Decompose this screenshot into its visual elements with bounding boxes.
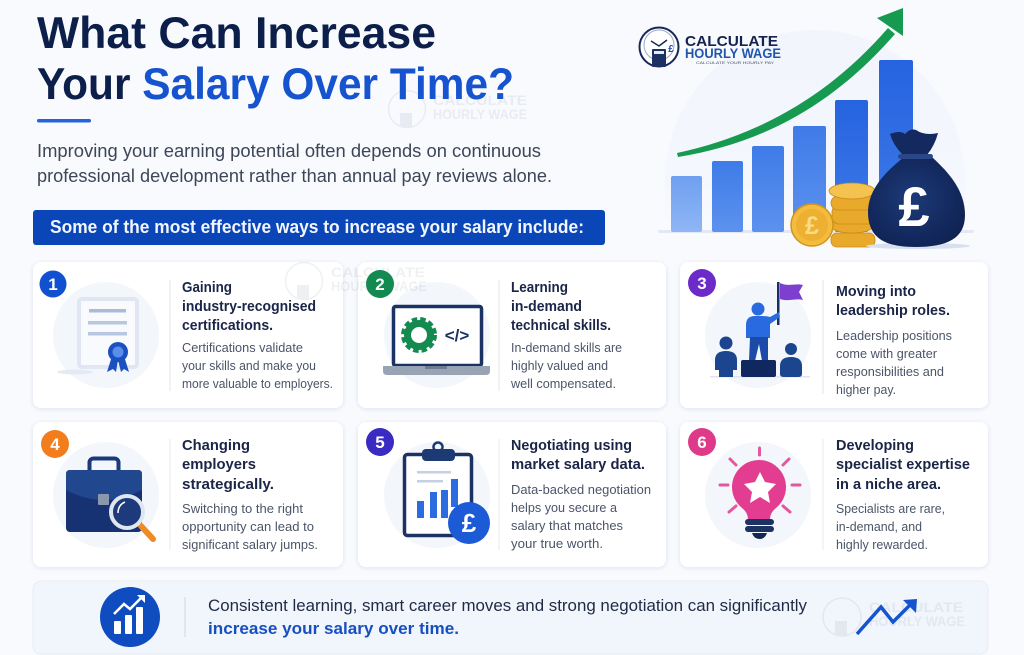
card 3 text: Moving into: [836, 283, 916, 300]
card 5 text: Negotiating using: [511, 437, 632, 454]
coin stack: [829, 183, 875, 247]
card 1 text: industry-recognised: [182, 298, 316, 315]
bars: [671, 60, 913, 232]
card 6 text: [836, 437, 970, 552]
icon: laptop: </>: [445, 326, 469, 345]
card 2 text: Learning: [511, 279, 568, 296]
coin with pound sign: £: [805, 212, 819, 240]
icon: briefcase with magnifier: [53, 442, 159, 548]
logo: [640, 28, 781, 67]
badge 1: [40, 270, 66, 298]
card 2 text: in-demand: [511, 298, 582, 315]
card 1 text: more valuable to employers.: [182, 377, 333, 391]
section banner: Some of the most effective ways to increase your salary include:: [50, 217, 584, 237]
card 4 text: Switching to the right: [182, 502, 304, 516]
logo: CALCULATE: [685, 33, 778, 50]
badge 6: [688, 428, 716, 456]
icon: certificate: [53, 282, 159, 388]
badge 1: 1: [48, 275, 58, 294]
card 6 text: highly rewarded.: [836, 538, 928, 552]
card 5 text: market salary data.: [511, 456, 645, 473]
footer text: [208, 596, 807, 638]
icon: light bulb with star: [705, 442, 811, 548]
watermark: top: HOURLY WAGE: [433, 106, 527, 122]
title accent bar: [37, 119, 91, 122]
intro paragraph: [37, 140, 552, 186]
card 1 text: [182, 279, 333, 391]
watermark: card 1: [286, 262, 427, 300]
card 3 text: come with greater: [836, 347, 937, 361]
card 4 text: employers: [182, 456, 256, 473]
watermark: top: CALCULATE: [433, 92, 527, 108]
card 1 text: your skills and make you: [182, 359, 316, 373]
icon: chart badge: [100, 587, 160, 647]
card 4 text: significant salary jumps.: [182, 538, 318, 552]
badge 3: [688, 269, 716, 297]
icon: clipboard with chart and pound coin: [384, 442, 490, 548]
money bag: £: [898, 175, 930, 238]
watermark: footer: [823, 598, 965, 636]
logo: CALCULATE YOUR HOURLY PAY: [696, 60, 774, 65]
arrow: green growth: [677, 8, 903, 157]
panel: footer callout: [33, 581, 988, 654]
card 3 text: Leadership positions: [836, 329, 952, 343]
card 4 text: [182, 437, 318, 552]
badge 5: [366, 428, 394, 456]
card 2 text: well compensated.: [510, 377, 616, 391]
card 2 text: In-demand skills are: [511, 341, 622, 355]
panel: card 1 certifications: [33, 262, 343, 408]
badge 3: 3: [697, 274, 707, 293]
panel: card 2 technical skills: [358, 262, 666, 408]
card 5 text: salary that matches: [511, 519, 623, 533]
card 5 text: your true worth.: [511, 537, 603, 551]
coin with pound sign: [791, 204, 833, 246]
card 2 text: technical skills.: [511, 317, 611, 334]
badge 6: 6: [697, 433, 707, 452]
intro paragraph: professional development rather than annual pay reviews alone.: [37, 165, 552, 186]
card 6 text: Specialists are rare,: [836, 502, 945, 516]
card 6 text: in a niche area.: [836, 476, 941, 493]
badge 2: [366, 270, 394, 298]
card 1 text: Gaining: [182, 279, 232, 296]
panel: card 4 changing employers: [33, 422, 343, 567]
card 1 text: Certifications validate: [182, 341, 303, 355]
panel: card 6 specialist expertise: [680, 422, 988, 567]
card 3 text: [836, 283, 952, 397]
intro paragraph: Improving your earning potential often depends on continuous: [37, 140, 541, 161]
card 1 text: certifications.: [182, 317, 273, 334]
icon: laptop: [383, 282, 490, 388]
badge 2: 2: [375, 275, 385, 294]
badge 5: 5: [375, 433, 385, 452]
title: What Can Increase: [37, 9, 436, 58]
card 5 text: [511, 437, 651, 551]
title: Your Salary Over Time?: [37, 60, 514, 109]
card 4 text: opportunity can lead to: [182, 520, 314, 534]
icon: leader with flag: [705, 282, 811, 388]
card 6 text: Developing: [836, 437, 914, 454]
card 5 text: helps you secure a: [511, 501, 617, 515]
panel: card 3 leadership: [680, 262, 988, 408]
icon: clipboard with chart and pound coin: £: [462, 508, 477, 538]
money bag: [866, 130, 970, 249]
badge 4: 4: [50, 435, 60, 454]
card 2 text: [510, 279, 622, 391]
logo: £: [668, 44, 674, 55]
watermark: card 1: CALCULATE: [331, 264, 425, 280]
arrow: footer growth: [857, 599, 917, 634]
panel: card 5 market data: [358, 422, 666, 567]
card 5 text: Data-backed negotiation: [511, 483, 651, 497]
card 6 text: specialist expertise: [836, 456, 970, 473]
card 6 text: in-demand, and: [836, 520, 922, 534]
card 3 text: higher pay.: [836, 383, 896, 397]
badge 4: [41, 430, 69, 458]
section banner: [33, 210, 605, 245]
watermark: top: [388, 90, 527, 128]
logo: HOURLY WAGE: [685, 45, 781, 61]
card 4 text: strategically.: [182, 476, 274, 493]
footer text: Consistent learning, smart career moves and strong negotiation can significantly: [208, 596, 807, 615]
watermark: footer: HOURLY WAGE: [869, 613, 965, 629]
title: [37, 9, 514, 109]
card 2 text: highly valued and: [511, 359, 608, 373]
watermark: card 1: HOURLY WAGE: [331, 278, 427, 294]
footer text: increase your salary over time.: [208, 619, 459, 638]
hero illustration: growth chart: [658, 8, 974, 249]
card 4 text: Changing: [182, 437, 250, 454]
card 3 text: leadership roles.: [836, 302, 950, 319]
card 3 text: responsibilities and: [836, 365, 944, 379]
watermark: footer: CALCULATE: [869, 599, 963, 615]
